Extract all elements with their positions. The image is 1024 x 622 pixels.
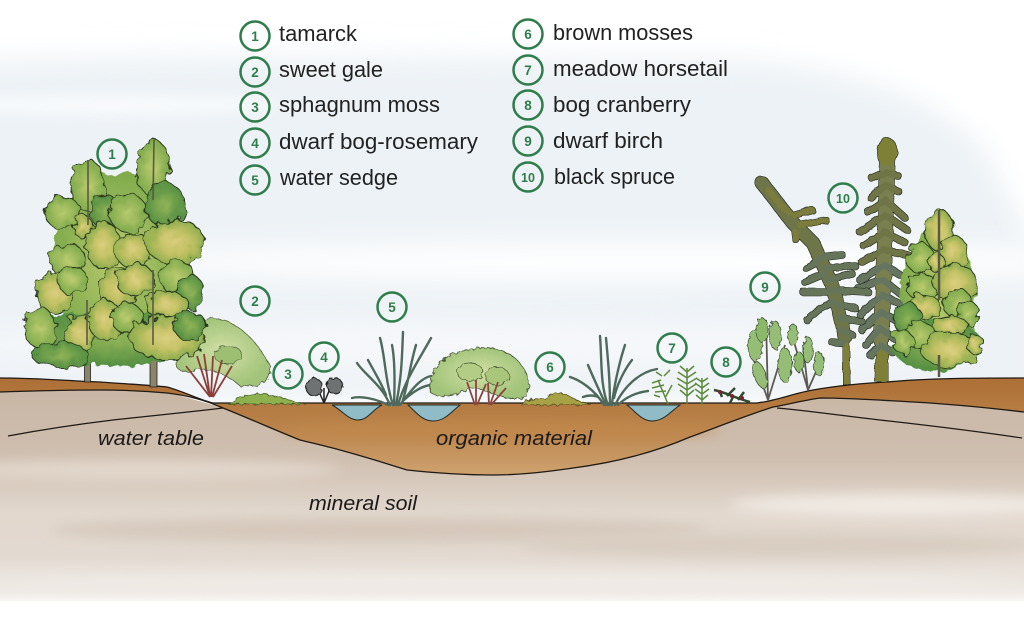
- label: organic material: organic material: [436, 428, 593, 450]
- shrub foliage: [430, 348, 529, 399]
- legend: bog cranberry: bog cranberry: [553, 92, 691, 117]
- marker 2: 2: [251, 294, 259, 309]
- legend: dwarf bog-rosemary: 4: [251, 136, 259, 151]
- legend: tamarck: tamarck: [279, 21, 358, 46]
- water sedge right: [570, 336, 657, 405]
- sweet gale foliage: [176, 318, 270, 386]
- legend: dwarf birch: [514, 126, 663, 156]
- legend: sweet gale: sweet gale: [279, 57, 383, 82]
- birch leaves: [748, 318, 824, 390]
- legend: bog cranberry: 8: [524, 98, 532, 113]
- marker 9: [750, 272, 780, 302]
- dwarf birch: [748, 318, 824, 400]
- legend: black spruce: [514, 162, 675, 192]
- marker 4: [310, 342, 338, 372]
- tamarack trees: [24, 140, 206, 387]
- legend: meadow horsetail: meadow horsetail: [553, 56, 728, 81]
- marker 1: [98, 140, 126, 168]
- marker 7: 7: [668, 341, 676, 356]
- right tamarack foliage: [892, 209, 983, 371]
- marker 10: 10: [836, 192, 850, 206]
- label: water table: water table: [98, 428, 204, 450]
- brown mosses: [521, 394, 591, 405]
- sweet gale stems: [186, 354, 232, 397]
- marker 10: [828, 184, 858, 212]
- water pools: [332, 405, 680, 421]
- legend: dwarf birch: 9: [524, 134, 532, 149]
- legend column 1: [240, 21, 478, 194]
- legend: dwarf bog-rosemary: dwarf bog-rosemary: [279, 129, 478, 154]
- right tamarack trunk: [938, 210, 940, 377]
- legend: brown mosses: [514, 20, 693, 48]
- legend: brown mosses: 6: [524, 27, 532, 42]
- diagram number markers: [98, 140, 858, 388]
- legend: sphagnum moss: sphagnum moss: [279, 92, 440, 117]
- legend: water sedge: [240, 165, 398, 194]
- sweet gale shrub: [176, 318, 270, 397]
- legend: water sedge: 5: [251, 173, 259, 188]
- marker 5: 5: [388, 300, 396, 315]
- mineral soil layer: [0, 382, 1024, 601]
- marker 5: [378, 292, 406, 322]
- tamarack right: [892, 209, 983, 377]
- organic material layer: [0, 378, 1024, 475]
- shrub stems: [467, 380, 506, 405]
- birch stems: [752, 320, 822, 400]
- legend column 2: [514, 20, 728, 192]
- legend: meadow horsetail: [514, 56, 728, 84]
- bog cranberry: [714, 388, 750, 403]
- water sedge left: [352, 332, 432, 405]
- black spruce leaning: [762, 183, 868, 384]
- marker 7: [658, 334, 686, 362]
- legend: sweet gale: [240, 57, 383, 86]
- marker 2: [240, 286, 270, 316]
- dwarf bog-rosemary: [306, 378, 343, 403]
- legend: brown mosses: brown mosses: [553, 20, 693, 45]
- sphagnum moss: [228, 394, 305, 404]
- legend: black spruce: 10: [521, 171, 535, 185]
- tamarack trunks: [84, 340, 157, 387]
- marker 8: [712, 348, 740, 376]
- legend: meadow horsetail: 7: [524, 63, 532, 78]
- legend: sphagnum moss: 3: [251, 100, 259, 115]
- legend: sphagnum moss: [240, 92, 440, 122]
- label: mineral soil: mineral soil: [309, 493, 418, 515]
- water table line: [8, 408, 1022, 438]
- tamarack central stems: [87, 140, 154, 345]
- legend: tamarck: 1: [251, 29, 259, 44]
- black spruce straight: [858, 138, 908, 382]
- marker 6: [536, 352, 564, 382]
- legend: black spruce: black spruce: [554, 164, 675, 189]
- marker 8: 8: [722, 355, 730, 370]
- legend: sweet gale: 2: [251, 65, 259, 80]
- legend: bog cranberry: [514, 90, 691, 120]
- marker 1: 1: [108, 147, 116, 162]
- marker 9: 9: [761, 280, 769, 295]
- legend: dwarf birch: dwarf birch: [553, 128, 663, 153]
- bog shrub centre: [430, 348, 529, 405]
- meadow horsetail: [652, 366, 709, 405]
- marker 4: 4: [320, 350, 328, 365]
- marker 3: 3: [284, 367, 292, 382]
- tamarack foliage: [24, 140, 206, 367]
- marker 6: 6: [546, 360, 554, 375]
- legend: tamarck: [240, 21, 358, 50]
- marker 3: [274, 360, 302, 388]
- legend: water sedge: water sedge: [279, 165, 398, 190]
